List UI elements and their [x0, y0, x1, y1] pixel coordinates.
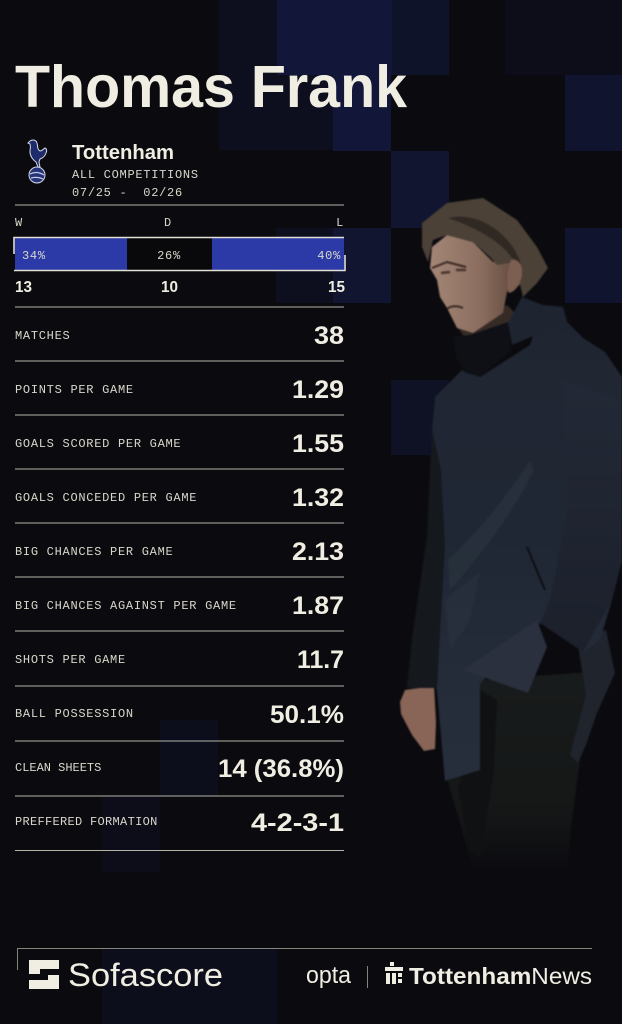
stat: goals scored — [15, 430, 344, 458]
competition: ALL COMPETITIONS — [72, 168, 199, 182]
icon: Tottenham crest — [28, 140, 47, 183]
stat: big chances against — [15, 592, 344, 620]
stat: preferred formation: PREFFERED FORMATION — [15, 815, 158, 829]
stat: big chances — [15, 538, 344, 566]
stat: big chances against: 1.87 — [292, 592, 344, 620]
stat: clean sheets: 14 (36.8%) — [218, 755, 344, 783]
stat: clean sheets: CLEAN SHEETS — [15, 761, 102, 775]
hair shadow strand — [448, 217, 521, 264]
stat: shots: 11.7 — [297, 646, 344, 674]
photo: manager — [400, 198, 622, 870]
results counts: 10 — [161, 279, 178, 296]
logo: Tottenham News: Tottenham News — [409, 963, 592, 989]
stat: possession: BALL POSSESSION — [15, 707, 134, 721]
left sleeve shade — [407, 430, 445, 688]
stat: points per game: 1.29 — [292, 376, 344, 404]
trousers — [448, 672, 590, 870]
stat: goals conceded: 1.32 — [292, 484, 344, 512]
right sleeve — [540, 380, 622, 652]
results counts — [15, 279, 345, 296]
stat: matches — [15, 322, 344, 350]
stat: preferred formation: 4-2-3-1 — [251, 809, 344, 837]
pocket zip — [527, 547, 545, 590]
results bar: 34% — [22, 249, 46, 263]
title: Thomas Frank — [15, 54, 407, 120]
stat: preferred formation — [15, 809, 344, 837]
stat: points per game: POINTS PER GAME — [15, 383, 134, 397]
results bar — [14, 238, 345, 271]
facial features — [432, 262, 466, 309]
stat: matches: MATCHES — [15, 329, 70, 343]
stat: big chances: 2.13 — [292, 538, 344, 566]
neck — [458, 305, 522, 345]
coat body — [407, 305, 622, 781]
results counts: 15 — [328, 279, 345, 296]
stat: clean sheets — [15, 755, 344, 783]
W D L heading labels — [15, 216, 344, 230]
stat: big chances: BIG CHANCES PER GAME — [15, 545, 173, 559]
club name: Tottenham — [72, 142, 174, 164]
results bar: 40% — [317, 249, 341, 263]
date range: 07/25 - 02/26 — [72, 186, 183, 200]
stat: points per game — [15, 376, 344, 404]
stat: possession: 50.1% — [270, 701, 344, 729]
coat back hem — [570, 630, 615, 763]
stat: possession — [15, 701, 344, 729]
logo: Sofascore: Sofascore — [68, 957, 223, 993]
hair — [422, 198, 548, 297]
logo: opta: opta — [306, 962, 352, 989]
hood — [508, 297, 583, 345]
stat: goals scored: 1.55 — [292, 430, 344, 458]
W D L heading labels: D — [164, 216, 172, 230]
stat: shots: SHOTS PER GAME — [15, 653, 126, 667]
results bar: 26% — [157, 249, 181, 263]
stat: goals conceded: GOALS CONCEDED PER GAME — [15, 491, 197, 505]
coat highlight fold — [448, 460, 534, 590]
ear — [507, 260, 522, 293]
face — [430, 235, 523, 333]
results counts: 13 — [15, 279, 32, 296]
coat flap fold — [463, 620, 547, 693]
footer divider — [18, 948, 592, 970]
stat: big chances against: BIG CHANCES AGAINST PER GAME — [15, 599, 237, 613]
W D L heading labels: L — [336, 216, 344, 230]
left hand — [400, 686, 436, 751]
stat: goals scored: GOALS SCORED PER GAME — [15, 437, 181, 451]
stat: shots — [15, 646, 344, 674]
stat: goals conceded — [15, 484, 344, 512]
collar — [453, 322, 511, 377]
W D L heading labels: W — [15, 216, 23, 230]
stat: matches: 38 — [314, 322, 344, 350]
